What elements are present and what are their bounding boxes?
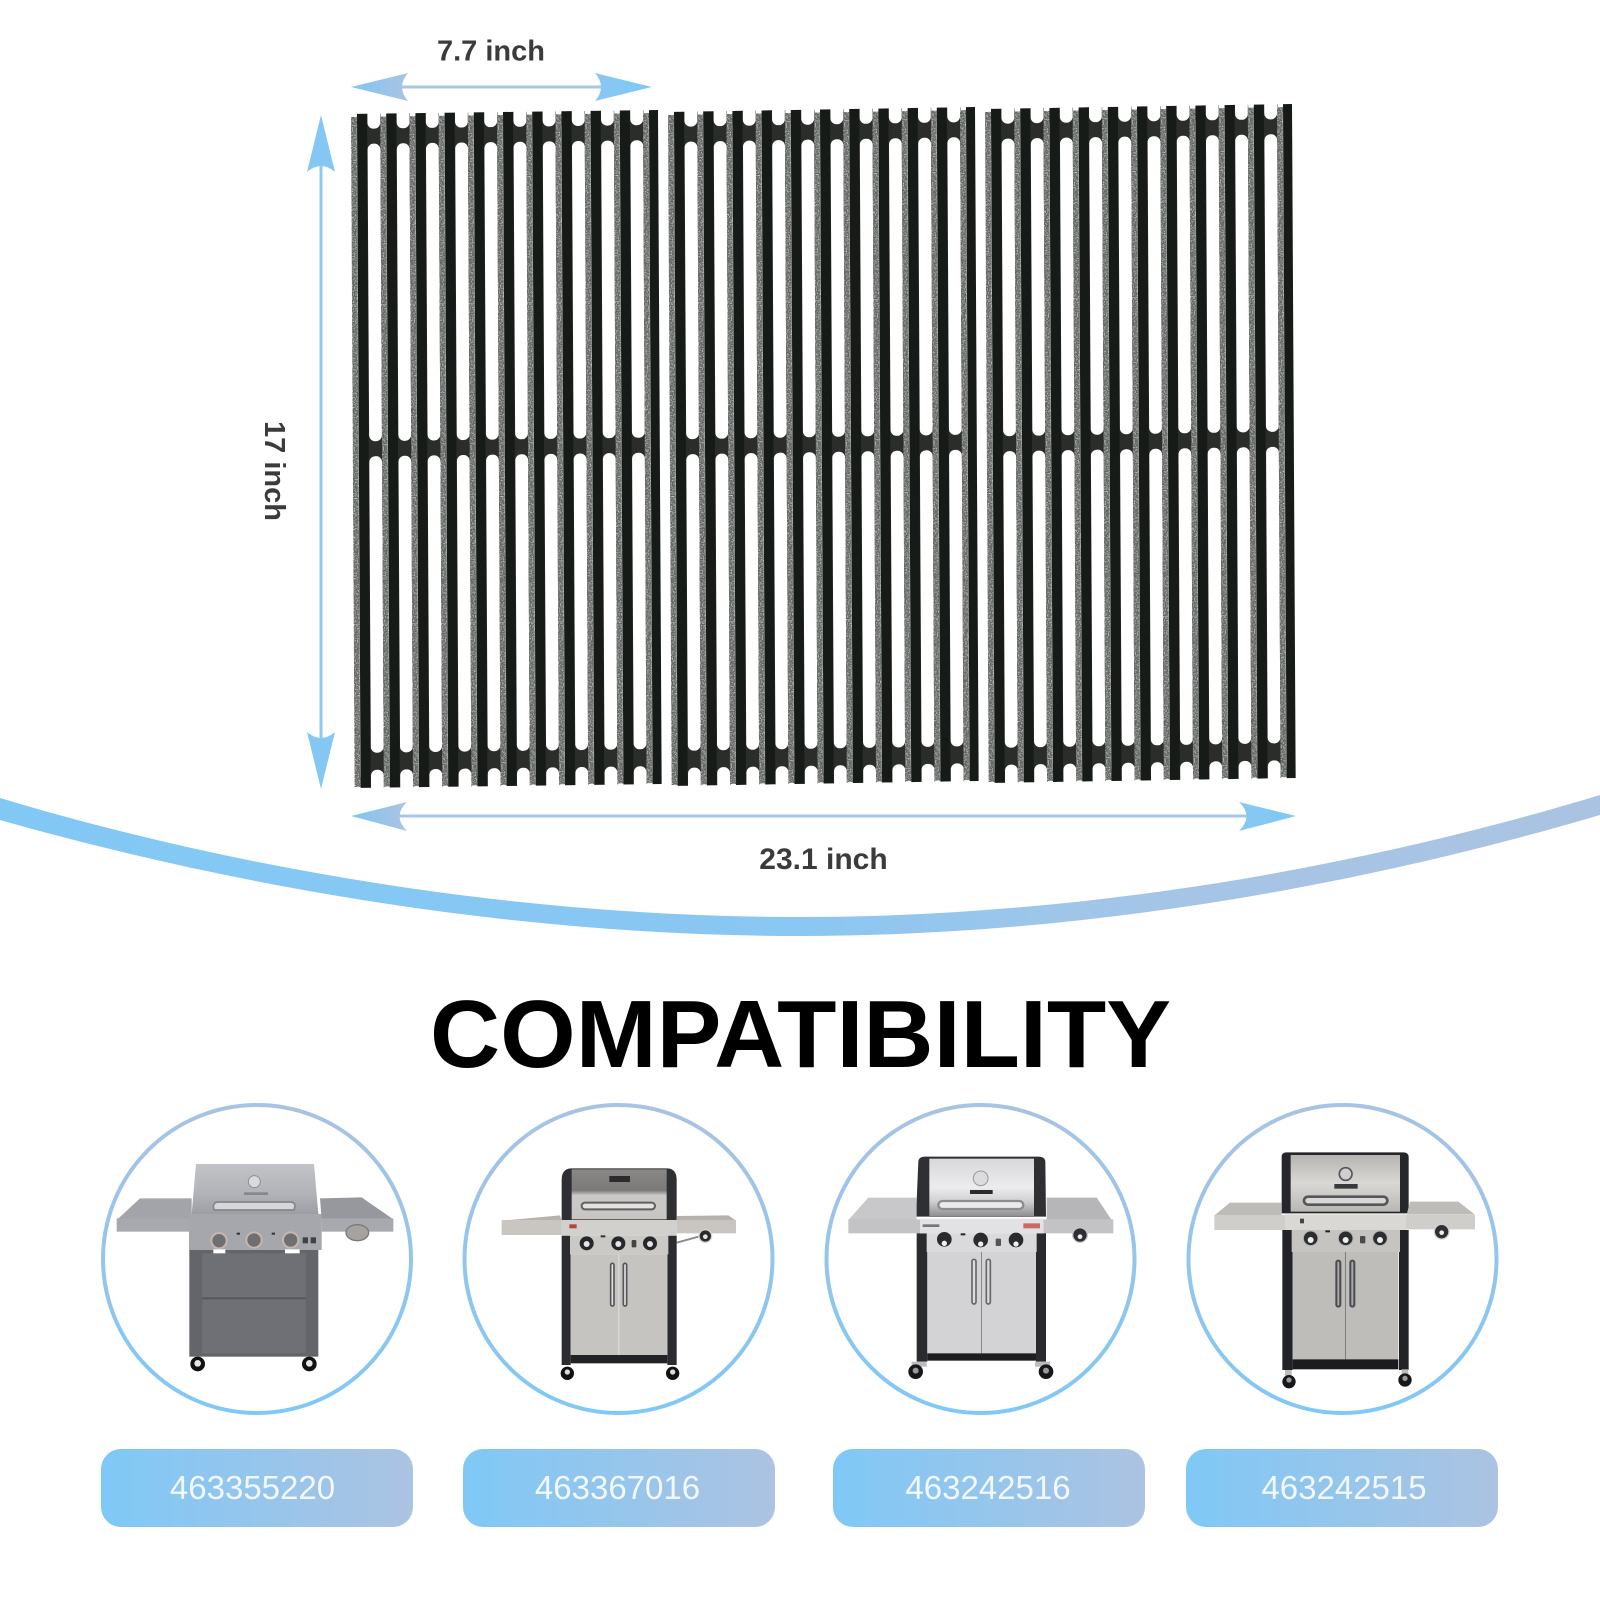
- model number badge: [463, 1449, 775, 1527]
- arrow: grate depth: [307, 115, 335, 789]
- arrow: total width: [351, 802, 1296, 831]
- title: COMPATIBILITY: [430, 981, 1171, 1088]
- circle frame: [103, 1105, 411, 1413]
- grill illustration: black and silver model: [502, 1168, 736, 1380]
- circle frame: [826, 1105, 1134, 1413]
- grill illustration: gray model: [117, 1164, 393, 1371]
- dimension label: single panel width: 7.7 inch: [437, 36, 545, 68]
- compatibility card: 463242515: [1186, 1105, 1498, 1527]
- model number badge: [1186, 1449, 1498, 1527]
- grate panel: right: [985, 96, 1296, 791]
- dimension label: total width: 23.1 inch: [759, 843, 888, 876]
- model number: 463242516: [905, 1469, 1071, 1506]
- compatibility card: 463367016: [463, 1105, 775, 1527]
- curved blue divider band: [0, 795, 1600, 936]
- grill grate set of three panels: [351, 96, 1296, 796]
- dimension label: grate depth: 17 inch: [258, 421, 290, 521]
- model number badge: [833, 1449, 1145, 1527]
- grill illustration: tall stainless model: [1214, 1152, 1475, 1388]
- model number badge: [101, 1449, 413, 1527]
- compatibility card: 463242516: [826, 1105, 1145, 1527]
- compatibility card: 463355220: [101, 1105, 413, 1527]
- grate panel: middle: [668, 99, 979, 794]
- circle frame: [464, 1105, 772, 1413]
- model number: 463355220: [170, 1469, 335, 1506]
- arrow: single panel width: [351, 73, 652, 101]
- grate panel: left: [351, 102, 662, 796]
- model number: 463242515: [1261, 1469, 1427, 1506]
- model number: 463367016: [535, 1469, 700, 1506]
- grill illustration: stainless model: [848, 1157, 1113, 1379]
- circle frame: [1188, 1105, 1496, 1413]
